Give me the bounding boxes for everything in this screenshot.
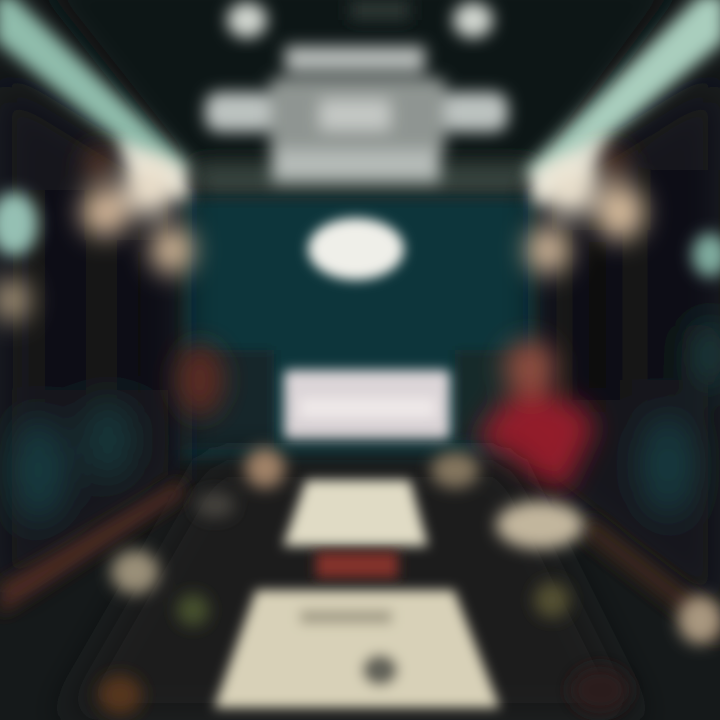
left wall with dark columns <box>0 80 180 600</box>
wall lamps: left <box>0 148 194 322</box>
presentation screen <box>284 370 450 440</box>
light strip: right <box>525 0 720 205</box>
items on table <box>98 448 720 715</box>
table <box>60 460 640 720</box>
table edge: left <box>0 480 185 615</box>
wall lamps: right <box>526 148 644 274</box>
person on left <box>176 344 224 416</box>
speech bubble blob on wall <box>308 218 404 280</box>
ceiling <box>40 0 680 192</box>
back wall <box>174 198 540 460</box>
paper: middle <box>283 480 428 546</box>
ceiling lights <box>227 0 493 38</box>
table edge: right <box>580 515 720 645</box>
side windows <box>0 192 720 277</box>
red stripe on table <box>316 552 398 578</box>
right wall with dark columns <box>540 80 720 620</box>
light strip: left <box>0 0 190 200</box>
person in red <box>478 340 594 490</box>
paper: front <box>214 590 500 708</box>
title: illegible blurred heading <box>205 46 508 182</box>
